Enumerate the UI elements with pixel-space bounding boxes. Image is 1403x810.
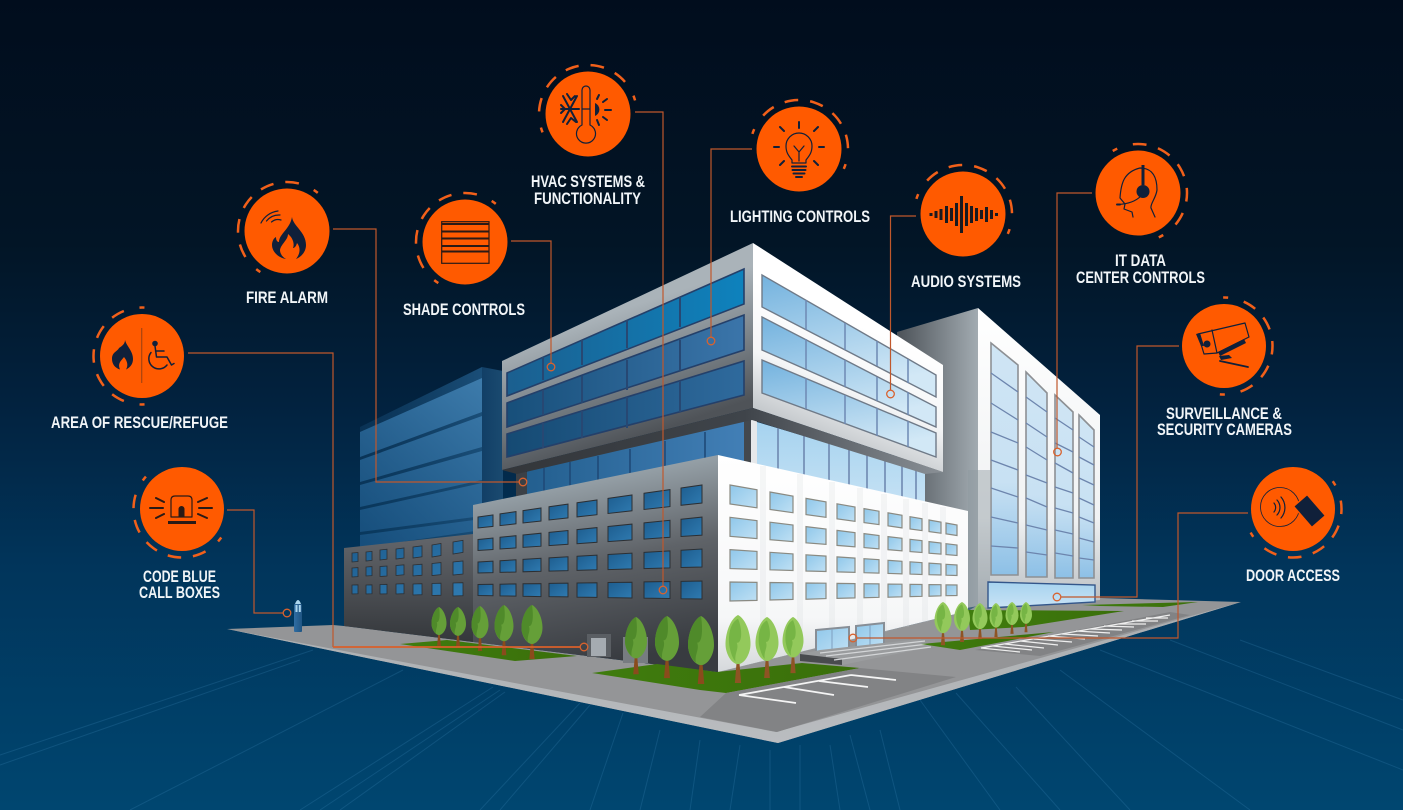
floor perspective lines	[0, 640, 1403, 810]
connector: audio	[887, 216, 916, 398]
connector: surveillance	[1053, 346, 1179, 601]
label	[1076, 251, 1205, 287]
label	[1157, 404, 1292, 439]
connector: area of rescue	[188, 353, 588, 651]
curb	[227, 602, 1241, 743]
label: DOOR ACCESS	[1246, 566, 1340, 585]
icon: flame and wheelchair	[112, 328, 174, 383]
ground plaza	[227, 598, 1241, 743]
item: lighting controls	[730, 87, 870, 226]
label: SURVEILLANCE &	[1166, 404, 1282, 423]
main low block, white face	[718, 455, 968, 672]
connector: code blue	[227, 510, 291, 617]
item: audio systems	[901, 152, 1025, 291]
entrance doors	[816, 623, 884, 652]
main low block, grey face	[473, 455, 718, 672]
tower windows	[991, 343, 1094, 578]
code blue call box	[294, 600, 302, 632]
icon: headset operator	[1117, 165, 1157, 217]
item: surveillance cameras	[1157, 297, 1292, 439]
connector: door access	[849, 513, 1248, 642]
mid glass storey, grey side	[516, 416, 751, 512]
label: FIRE ALARM	[246, 288, 328, 307]
icon: light bulb	[774, 122, 824, 177]
low left wing	[344, 534, 473, 642]
blue back tower	[360, 367, 503, 565]
icon: beacon light	[150, 496, 212, 524]
label: HVAC SYSTEMS &	[531, 172, 645, 191]
label: AREA OF RESCUE/REFUGE	[51, 413, 228, 432]
label	[139, 567, 220, 602]
item: shade controls	[397, 174, 533, 319]
connector: hvac	[635, 112, 667, 594]
lawns	[400, 602, 1198, 693]
label: SHADE CONTROLS	[403, 300, 525, 319]
label: CODE BLUE	[143, 567, 216, 586]
entrance steps	[800, 639, 931, 665]
label: FUNCTIONALITY	[534, 189, 642, 208]
connector: it data center	[1054, 193, 1092, 456]
item: area of rescue/refuge	[51, 305, 228, 432]
label: LIGHTING CONTROLS	[730, 207, 870, 226]
label: AUDIO SYSTEMS	[911, 272, 1021, 291]
icon: security camera	[1196, 323, 1249, 367]
item: door access	[1225, 441, 1361, 585]
tower ground floor glazing	[988, 582, 1095, 608]
connector: lighting	[707, 149, 752, 345]
trees	[432, 602, 1032, 684]
connector: shade controls	[511, 241, 555, 371]
label: SECURITY CAMERAS	[1157, 420, 1292, 439]
upper block, white face	[502, 243, 943, 474]
item: it data center controls	[1071, 126, 1205, 287]
parking lot, side	[975, 612, 1190, 656]
white face windows	[730, 485, 957, 601]
icon: card reader	[1260, 488, 1325, 527]
mid glass storey, white side	[751, 416, 925, 515]
right tower	[897, 308, 1100, 620]
icon: thermometer, snow and sun	[561, 86, 611, 143]
item: hvac systems	[524, 50, 652, 208]
parking lot, front	[700, 668, 956, 732]
grey face windows	[478, 485, 702, 599]
item: fire alarm	[219, 163, 355, 307]
label: CENTER CONTROLS	[1076, 268, 1205, 287]
icon: window shade	[442, 222, 489, 263]
upper block, grey face	[502, 243, 753, 470]
icon: flame with signal	[261, 211, 306, 259]
label: IT DATA	[1115, 251, 1166, 270]
icon: sound wave	[931, 196, 996, 233]
wing windows	[352, 540, 463, 596]
item: code blue call boxes	[114, 441, 250, 602]
service doors	[587, 634, 648, 663]
connector: fire alarm	[333, 229, 527, 486]
label	[531, 172, 645, 208]
label: CALL BOXES	[139, 583, 220, 602]
